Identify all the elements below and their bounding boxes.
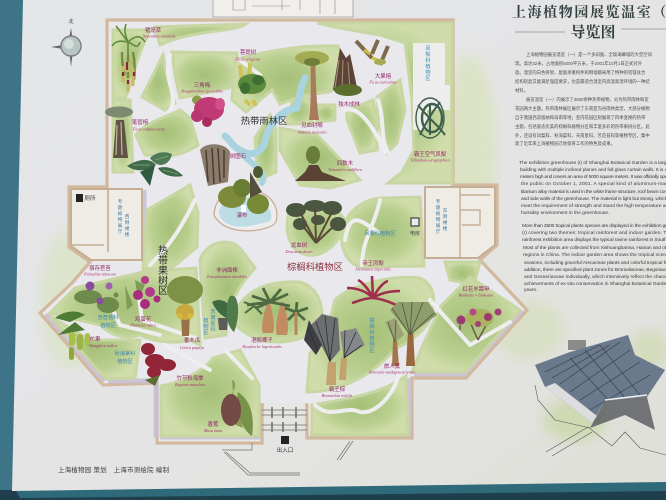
east hall name: 专 bbox=[436, 198, 441, 205]
map labels: Dracaena draco bbox=[285, 249, 312, 254]
map labels: Tetrameles nudiflora bbox=[328, 167, 362, 172]
blue zone labels: 物 bbox=[425, 68, 431, 76]
heading: fruit zone: 热 bbox=[158, 244, 168, 257]
blue zone labels: 苦苣苔科 bbox=[98, 313, 118, 321]
text block: English introduction: humidity environment in the greenhouse. bbox=[521, 210, 609, 216]
west hall name: 侧 bbox=[125, 219, 130, 226]
text block: Chinese introduction: 主题，包括姿态优美的棕榈科植物分区和丰富多彩的热带果树分区。此 bbox=[515, 123, 650, 130]
map labels: 红花羊蹄甲 bbox=[463, 285, 489, 293]
map labels: Nepenthes mirabilis bbox=[142, 34, 176, 38]
west hall name: 展 bbox=[118, 223, 123, 229]
panel: west annex hall bbox=[71, 189, 142, 260]
icon: anthurium bbox=[212, 296, 238, 332]
credits: 上海植物园 策划 上海市测绘院 编制 bbox=[58, 465, 169, 474]
east hall name: 东 bbox=[443, 207, 448, 213]
blue zone labels: 植物区 bbox=[100, 321, 116, 329]
compass: 北 bbox=[68, 18, 74, 25]
blue zone labels: 物 bbox=[369, 340, 375, 348]
text block: Chinese introduction bbox=[515, 51, 652, 147]
map labels: Begonia maculata bbox=[175, 382, 205, 387]
entrance label: 出入口 bbox=[277, 446, 293, 454]
map labels: Bougainvillea spectabilis bbox=[181, 88, 223, 94]
text block: Chinese introduction: 结构轻盈又能满足强度要求，也是最适合温室内高温高湿环境的一种结 bbox=[515, 78, 650, 85]
text block: Chinese introduction: 自于我国西双版纳和海南等地；室内花园区则展现了四季变换的热带 bbox=[515, 114, 646, 121]
map labels: Bismarckia nobilis bbox=[322, 393, 353, 398]
map labels: 独木成林 bbox=[338, 100, 360, 108]
map labels: Hyophorbe lagenicaulis bbox=[241, 344, 282, 349]
map labels: Ficus subpisocarpa bbox=[132, 126, 165, 132]
map labels: 酒瓶椰子 bbox=[251, 336, 273, 344]
text block: English introduction bbox=[519, 160, 666, 293]
map labels: 非洲面棒 bbox=[216, 266, 238, 274]
icon: traveller's palm bbox=[385, 302, 437, 366]
east hall name: 侧 bbox=[443, 213, 448, 220]
heading: fruit zone bbox=[158, 244, 168, 297]
map labels: 宿存苣苔 bbox=[89, 264, 111, 272]
power room label bbox=[410, 218, 420, 237]
restroom icon bbox=[76, 194, 83, 202]
icon: waterfall palms bbox=[218, 166, 269, 214]
building sketch bbox=[535, 330, 666, 456]
map labels: 竹节秋海棠 bbox=[177, 374, 204, 382]
west hall name: 植 bbox=[118, 210, 123, 217]
west hall name: 厅 bbox=[118, 229, 123, 234]
map labels: Ravenala madagascariensis bbox=[368, 370, 415, 374]
icon: Bauhinia tree bbox=[456, 308, 502, 340]
blue zone labels: 植 bbox=[425, 62, 431, 70]
title bbox=[512, 2, 666, 42]
heading: fruit zone: 树 bbox=[158, 274, 168, 287]
map labels bbox=[83, 26, 493, 433]
blue zone labels: 凤 bbox=[425, 45, 431, 52]
map labels: 杧果 bbox=[90, 335, 101, 343]
icon: papaya tree bbox=[167, 276, 203, 336]
map labels: Plumeria rubra bbox=[129, 322, 156, 328]
icon: pitcher plant bbox=[112, 24, 145, 92]
west hall name: 西 bbox=[125, 214, 130, 220]
blue zone labels: 区 bbox=[369, 347, 375, 354]
icon: dragon trees bbox=[286, 200, 346, 243]
west hall name: 裙 bbox=[125, 225, 130, 232]
icon: bottle palms bbox=[244, 288, 308, 335]
map labels: 菩提树 bbox=[240, 48, 257, 56]
map labels: Ficus religiosa bbox=[235, 56, 260, 62]
blue zone labels: 凤梨科植物区 bbox=[364, 229, 396, 237]
map labels: Antiaris toxicaria bbox=[296, 130, 326, 134]
blue zone labels: 区 bbox=[203, 329, 209, 336]
blue zone labels: 星 bbox=[210, 320, 216, 327]
map labels: 龙血树 bbox=[291, 241, 308, 249]
text block: Chinese introduction: 现了近年来上海植物园迁地保育工作的特色及成果。 bbox=[515, 140, 615, 147]
pond and waterfall bbox=[214, 189, 277, 231]
blue zone labels: 秋海棠科 bbox=[115, 349, 135, 357]
icon: Ficus auriculata bbox=[356, 40, 388, 65]
east hall name: 植 bbox=[436, 210, 441, 217]
map floor plan outline bbox=[40, 20, 527, 443]
lilac shadow along map edges bbox=[46, 190, 522, 437]
map labels: 鸡蛋花 bbox=[135, 315, 152, 323]
blue zone labels bbox=[98, 45, 431, 365]
icon: aerial root tree bbox=[200, 144, 230, 186]
west hall name bbox=[118, 198, 130, 238]
map labels: Tillandsia xerographica bbox=[410, 158, 450, 162]
map labels: Carica papaya bbox=[180, 345, 204, 350]
west hall name: 题 bbox=[118, 205, 123, 211]
east hall name: 展 bbox=[436, 223, 441, 229]
blue zone labels: 科 bbox=[369, 328, 375, 336]
map labels: 瀑布 bbox=[237, 211, 248, 219]
text block: Chinese introduction: 花园两大主题。热带雨林展区展示了东南亚沟谷雨林类型，大部分植物 bbox=[515, 105, 650, 112]
east hall name: 厅 bbox=[436, 229, 441, 234]
blue zone labels: 植 bbox=[203, 316, 209, 324]
map labels: 树图石 bbox=[230, 152, 247, 160]
text block: Chinese introduction: 展览温室（一）内展示了3500余种热带植物，分为热带雨林和室 bbox=[526, 96, 649, 103]
blue zone labels: 梨 bbox=[425, 50, 431, 58]
east hall name: 裙 bbox=[443, 219, 448, 226]
icon: entrance bbox=[281, 436, 289, 444]
map labels: 见血封喉 bbox=[301, 121, 323, 129]
icon: taro leaves bbox=[127, 152, 183, 186]
text block: Chinese introduction: 材料。 bbox=[515, 87, 528, 94]
map labels: Bauhinia × blakeana bbox=[459, 292, 493, 298]
icon: banana bbox=[221, 380, 253, 436]
title rules bbox=[515, 29, 666, 32]
icon: Ficus religiosa bbox=[238, 63, 266, 106]
heading: fruit zone: 果 bbox=[158, 265, 168, 277]
map labels: 大果榕 bbox=[375, 72, 392, 80]
text block: Chinese introduction: 外，还设有凤梨科、秋海棠科、天南星科、苦苣苔科等植物专区，集中 bbox=[515, 132, 650, 139]
blue zone labels: 植物区 bbox=[117, 357, 133, 365]
blue zone labels: 棕 bbox=[369, 316, 375, 324]
east hall name: 题 bbox=[436, 205, 441, 211]
map labels: 香蕉 bbox=[208, 420, 219, 428]
map labels: Mangifera indica bbox=[88, 343, 117, 348]
east hall name: 物 bbox=[436, 216, 441, 223]
blue zone labels: 区 bbox=[425, 75, 431, 82]
blue zone labels: 科 bbox=[210, 325, 216, 333]
blue zone labels: 榈 bbox=[369, 322, 375, 330]
icon: plumeria bbox=[125, 276, 160, 310]
heading: palm zone: 棕榈科植物区 bbox=[287, 261, 343, 272]
power room label: 电房 bbox=[410, 230, 420, 237]
map labels: 三角梅 bbox=[194, 81, 211, 89]
blue zone labels: 物 bbox=[203, 322, 209, 330]
icon: imperial bromeliad bbox=[347, 276, 400, 305]
map labels: Musa nana bbox=[203, 428, 222, 433]
panel: rainforest planting beds bbox=[113, 23, 452, 188]
east hall name: 楼 bbox=[443, 225, 448, 232]
blue zone labels: 南 bbox=[210, 313, 216, 321]
icon: Tetrameles tree bbox=[295, 146, 346, 181]
east hall name bbox=[436, 198, 448, 234]
icon: gesneriad bbox=[74, 282, 119, 313]
map paths bbox=[108, 55, 510, 412]
map labels: 旅人蕉 bbox=[384, 362, 401, 370]
panel: east annex hall bbox=[425, 187, 495, 258]
icon: mango bbox=[55, 312, 90, 360]
west hall name: 楼 bbox=[125, 231, 130, 238]
text block: Chinese introduction: 放。温室的白色骨架、屋面承重构件和侧墙都采用了特种的铝镁钛合 bbox=[515, 69, 646, 76]
entrance opening in outline bbox=[264, 402, 305, 409]
icon: banyan bbox=[333, 48, 362, 96]
text block: English introduction: meters high and covers an area of 5000 square meters. It was officially open bbox=[520, 174, 666, 180]
blue zone labels: 天 bbox=[210, 308, 216, 315]
river bbox=[225, 78, 305, 183]
blue zone labels: 植 bbox=[369, 334, 375, 342]
panel: palm and fruit planting beds bbox=[50, 185, 520, 436]
map labels: 猪笼草 bbox=[145, 26, 162, 34]
icon: red begonia bbox=[141, 343, 176, 386]
text block: English introduction: building with multiple inclined planes and full glass curtain walls. It is up bbox=[520, 167, 666, 173]
text block: English introduction: years. bbox=[524, 287, 537, 293]
white conservatory building strip bbox=[413, 43, 450, 130]
title: 导览图 bbox=[570, 21, 616, 42]
text block: Chinese introduction: 筑。高达32米，占地面积5000平方米，于2001年10月1日正式对外 bbox=[515, 60, 643, 67]
map labels: 帝王凤梨 bbox=[362, 259, 384, 267]
map labels: 四数木 bbox=[337, 159, 354, 167]
map labels: Primulina tabacum bbox=[83, 272, 116, 276]
icon: Ficus subpisocarpa tree bbox=[105, 106, 133, 158]
map labels: Alcantarea imperialis bbox=[354, 266, 391, 272]
blue zone labels: 科 bbox=[425, 56, 431, 64]
icon: Bismarck palms bbox=[304, 314, 365, 385]
compass bbox=[51, 18, 82, 67]
west hall name: 专 bbox=[118, 198, 123, 205]
text block: English introduction: The exhibition greenhouse (I) of Shanghai Botanical Garden is a large bbox=[519, 160, 666, 166]
heading: fruit zone: 带 bbox=[158, 255, 168, 267]
icon: Tillandsia bbox=[416, 98, 445, 138]
west hall name: 物 bbox=[118, 216, 123, 223]
icon: bougainvillea bbox=[191, 96, 225, 127]
map labels: Ficus auriculata bbox=[368, 80, 397, 84]
text block: Chinese introduction: 上海植物园展览温室（一）是一个多斜面、全玻璃幕墙的大型空间 bbox=[526, 51, 652, 58]
map labels: Encephalartos mirabilis bbox=[206, 274, 247, 279]
icon: Antiaris tree bbox=[295, 51, 329, 120]
map labels: 番木瓜 bbox=[184, 336, 201, 344]
map labels: 笔管榕 bbox=[132, 118, 149, 126]
map labels: 霸王棕 bbox=[329, 385, 346, 393]
restroom label: 厕所 bbox=[84, 194, 96, 202]
map labels: 霸王空气凤梨 bbox=[414, 150, 447, 158]
main entrance bbox=[222, 407, 353, 475]
top entrance building outline bbox=[213, 0, 353, 17]
heading: rainforest zone: 热带雨林区 bbox=[241, 115, 287, 126]
heading: fruit zone: 区 bbox=[158, 285, 168, 297]
